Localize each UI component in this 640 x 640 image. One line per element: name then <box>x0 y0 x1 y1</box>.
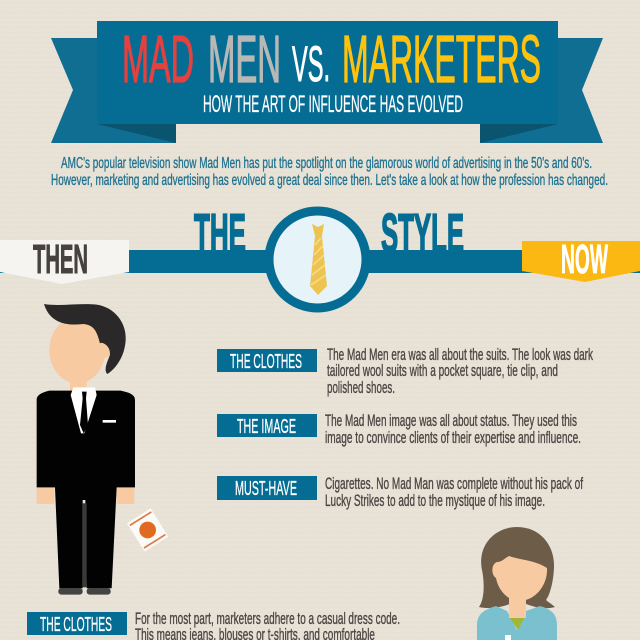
necktie <box>80 392 88 433</box>
right ribbon tail <box>480 38 603 143</box>
icon: cigarette pack <box>127 508 168 552</box>
shirt detail <box>505 635 511 640</box>
title: MEN <box>208 22 281 97</box>
now ribbon <box>522 236 640 282</box>
label <box>217 414 317 437</box>
trouser crease <box>83 503 87 587</box>
section header: the style <box>0 202 640 308</box>
neck and face <box>492 556 547 618</box>
label <box>217 476 317 500</box>
icon: tie <box>310 224 327 295</box>
description <box>327 346 593 397</box>
hair <box>44 304 126 374</box>
hands <box>37 485 134 504</box>
shirt <box>477 606 557 640</box>
hair <box>479 527 555 608</box>
header bar <box>0 250 640 273</box>
section header: the style: THE <box>194 202 246 264</box>
description: For the most part, marketers adhere to a casual dress code. <box>135 610 400 628</box>
marketers row: the clothes <box>27 610 400 640</box>
title <box>122 22 541 97</box>
pocket square <box>103 420 116 423</box>
shoes <box>58 588 111 595</box>
then ribbon <box>0 236 129 284</box>
marketers row: the clothes: THE CLOTHES <box>40 614 112 636</box>
description <box>325 475 583 510</box>
description <box>325 412 581 447</box>
left ribbon tail <box>51 38 176 143</box>
section header: the style: STYLE <box>381 202 464 264</box>
mad men row: the image <box>217 412 581 447</box>
collar <box>509 617 525 630</box>
then ribbon: THEN <box>33 236 88 282</box>
figure: marketer woman <box>477 527 557 640</box>
tie medallion <box>269 211 366 308</box>
banner body <box>97 21 558 124</box>
label <box>27 612 127 635</box>
title: VS. <box>292 36 330 92</box>
mad men row: must-have <box>217 475 583 510</box>
mad men row: the clothes <box>217 346 593 397</box>
title banner <box>51 21 603 143</box>
title: MAD <box>122 22 194 97</box>
mad men row: must-have: MUST-HAVE <box>235 478 297 500</box>
description <box>135 610 400 640</box>
shirt <box>71 387 97 433</box>
ribbon folds <box>97 124 558 143</box>
suit <box>37 391 135 588</box>
mad men row: the clothes: THE CLOTHES <box>230 351 302 373</box>
mad men row: the image: THE IMAGE <box>237 416 296 438</box>
label <box>217 349 317 372</box>
face and ear <box>49 317 113 392</box>
description: polished shoes. <box>327 379 395 397</box>
figure: mad man <box>37 304 168 595</box>
intro text <box>51 155 608 189</box>
